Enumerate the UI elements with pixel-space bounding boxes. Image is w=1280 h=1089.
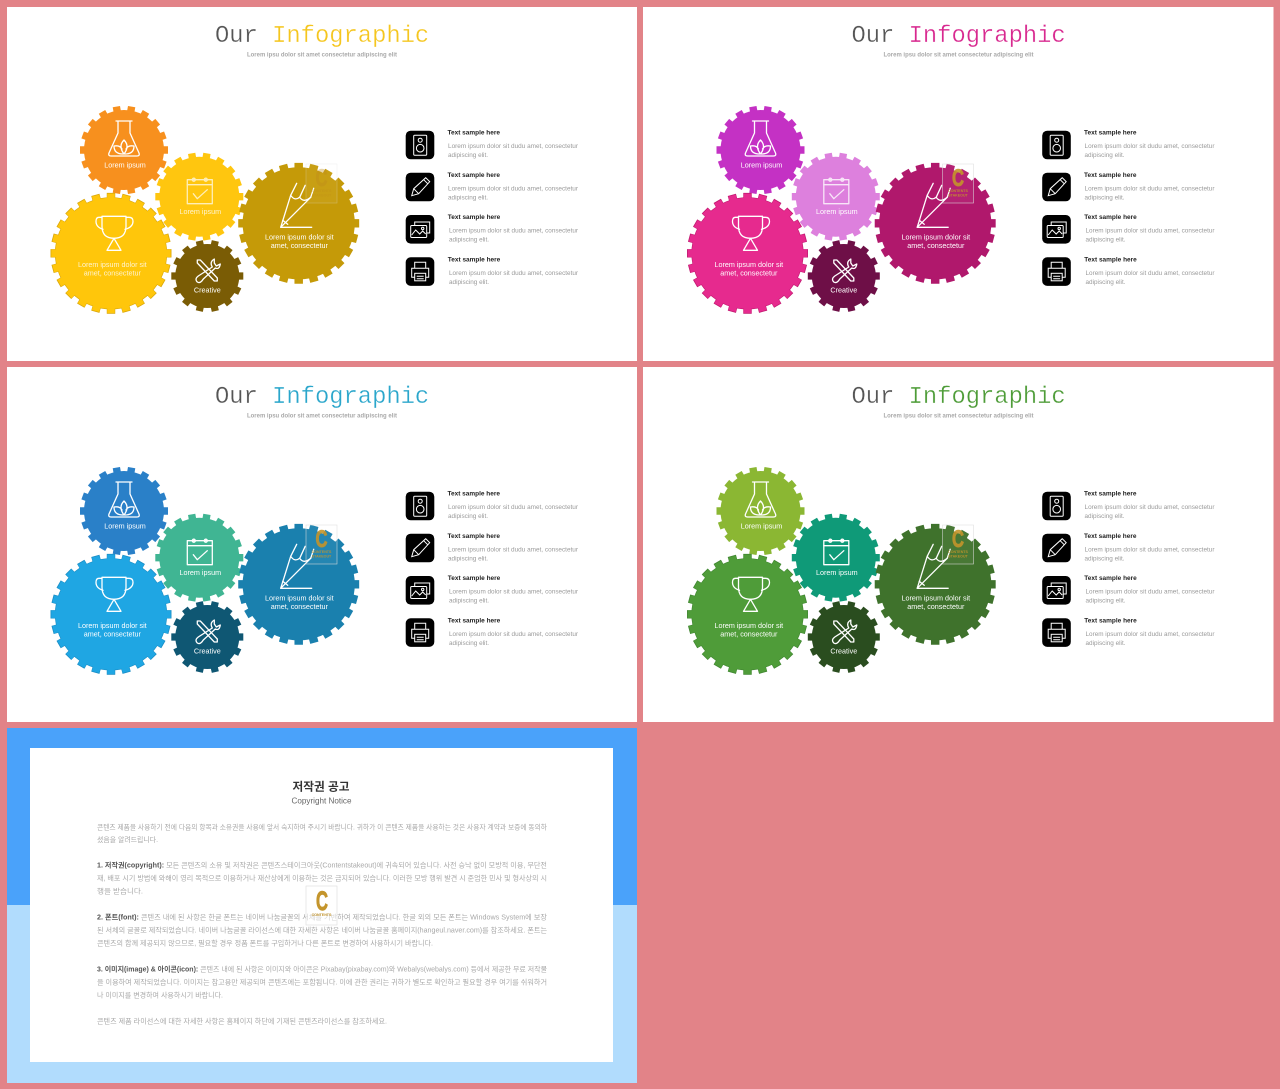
watermark: STAKEOUT bbox=[948, 554, 969, 558]
list item 2 bbox=[406, 172, 579, 202]
list item 1: Text sample here bbox=[1084, 130, 1137, 137]
list item 4: Lorem ipsum dolor sit dudu amet, consectetur bbox=[449, 270, 579, 277]
list item 1: adipiscing elit. bbox=[1084, 513, 1125, 520]
gear: tools bbox=[808, 241, 880, 311]
watermark: C bbox=[952, 526, 964, 553]
list item 4: Text sample here bbox=[448, 617, 501, 624]
watermark: CONTENTS bbox=[948, 550, 968, 554]
list item 4 bbox=[1042, 617, 1215, 647]
watermark: C bbox=[952, 165, 964, 192]
panel: copyright notice bbox=[7, 728, 637, 1083]
list item 2: Lorem ipsum dolor sit dudu amet, consectetur bbox=[448, 546, 579, 554]
list item 3: Lorem ipsum dolor sit dudu amet, consectetur bbox=[449, 588, 579, 596]
panel: green infographic bbox=[643, 367, 1274, 722]
list item 3: Lorem ipsum dolor sit dudu amet, consectetur bbox=[449, 228, 579, 234]
watermark: CONTENTS bbox=[312, 189, 332, 193]
list item 3 bbox=[406, 575, 579, 605]
gear: pencil bbox=[875, 163, 996, 284]
intro paragraph: 콘텐츠 제품을 사용하기 전에 다음의 항목과 소유권을 사용에 앞서 숙지하여 주시기 바랍니다. 귀하가 이 콘텐츠 제품을 사용하는 것은 사용자 계약과 보증에 동의하 bbox=[97, 822, 548, 832]
gear: pencil: Lorem ipsum dolor sit bbox=[901, 232, 970, 241]
watermark: STAKEOUT bbox=[948, 194, 969, 198]
gear: trophy bbox=[51, 554, 171, 675]
watermark bbox=[942, 525, 974, 564]
list item 1: Lorem ipsum dolor sit dudu amet, consectetur bbox=[1084, 143, 1215, 150]
gear: trophy: Lorem ipsum dolor sit bbox=[714, 621, 783, 630]
list item 3: Lorem ipsum dolor sit dudu amet, consectetur bbox=[1086, 228, 1215, 234]
watermark: CONTENTS bbox=[312, 913, 332, 917]
gear: calendar bbox=[155, 514, 243, 601]
panel: blue infographic bbox=[7, 367, 637, 722]
list item 1: adipiscing elit. bbox=[448, 152, 488, 159]
watermark: CONTENTS bbox=[312, 550, 332, 554]
list item 4: Text sample here bbox=[1084, 256, 1137, 263]
list item 1: Lorem ipsum dolor sit dudu amet, consectetur bbox=[1084, 504, 1215, 511]
list item 4: Lorem ipsum dolor sit dudu amet, consectetur bbox=[449, 631, 579, 638]
subtitle: Lorem ipsu dolor sit amet consectetur adipiscing elit bbox=[884, 52, 1034, 58]
notice subheading: Copyright Notice bbox=[292, 796, 352, 806]
gear: trophy: Lorem ipsum dolor sit bbox=[78, 621, 147, 630]
list item 2: Text sample here bbox=[448, 533, 500, 540]
watermark: C bbox=[316, 886, 328, 916]
watermark: C bbox=[316, 526, 328, 553]
list item 2 bbox=[1042, 172, 1215, 202]
section 2 font: 2. 폰트(font): 콘텐츠 내에 된 사항은 한글 폰트는 네이버 나눔글꼴의 서체를 기반하여 제작되었습니다. 한글 외의 모든 폰트는 Windows System에 보장 bbox=[97, 912, 548, 922]
gear: tools: Creative bbox=[830, 285, 857, 294]
subtitle: Lorem ipsu dolor sit amet consectetur adipiscing elit bbox=[247, 52, 398, 58]
gear: pencil bbox=[238, 524, 359, 645]
gear: pencil bbox=[875, 524, 996, 645]
gear: flask: Lorem ipsum bbox=[104, 160, 146, 170]
list item 3: adipiscing elit. bbox=[449, 598, 489, 604]
panel: yellow infographic bbox=[7, 7, 637, 361]
gear: flask bbox=[716, 468, 804, 554]
list item 4: Lorem ipsum dolor sit dudu amet, consectetur bbox=[1086, 631, 1215, 638]
intro paragraph bbox=[97, 822, 548, 844]
section 3 image and icon: 을 이용하여 제작되었습니다. 이미지는 참고용만 제공되며 콘텐츠에는 포함됩니다. 이에 관한 권리는 귀하가 별도로 확인하고 필요할 경우 여기를 쉬워하거 bbox=[97, 978, 547, 986]
gear: flask bbox=[80, 107, 168, 193]
gear: flask: Lorem ipsum bbox=[741, 522, 782, 530]
list item 2: Lorem ipsum dolor sit dudu amet, consectetur bbox=[1084, 546, 1215, 554]
title: Our Infographic bbox=[215, 384, 429, 411]
gear: pencil: amet, consectetur bbox=[271, 241, 328, 250]
gear: pencil: Lorem ipsum dolor sit bbox=[265, 232, 334, 241]
gear: pencil: Lorem ipsum dolor sit bbox=[901, 593, 970, 602]
list item 4 bbox=[406, 256, 579, 286]
gear: calendar bbox=[792, 514, 880, 601]
list item 4 bbox=[406, 617, 579, 647]
section 2 font: 된 서체의 글꼴로 제작되었습니다. 네이버 나눔글꼴 라이선스에 대한 자세한 사항은 네이버 나눔글꼴 홈페이지(hangeul.naver.com)를 참조하세요. 폰트는 bbox=[97, 926, 548, 934]
list item 1 bbox=[1042, 130, 1215, 159]
gear: flask: Lorem ipsum bbox=[741, 160, 782, 170]
closing line: 콘텐츠 제품 라이선스에 대한 자세한 사항은 홈페이지 하단에 기재된 콘텐츠라이선스를 참조하세요. bbox=[97, 1016, 387, 1026]
list item 1: adipiscing elit. bbox=[448, 513, 488, 520]
watermark bbox=[306, 525, 337, 564]
gear: trophy: amet, consectetur bbox=[84, 629, 141, 638]
list item 1: Text sample here bbox=[1084, 491, 1137, 498]
gear: tools bbox=[171, 241, 243, 311]
gear: tools bbox=[171, 602, 243, 672]
list item 2: Text sample here bbox=[1084, 172, 1137, 179]
list item 3 bbox=[406, 214, 579, 244]
subtitle: Lorem ipsu dolor sit amet consectetur adipiscing elit bbox=[884, 412, 1034, 420]
panel: magenta infographic bbox=[643, 7, 1274, 361]
list item 3: Lorem ipsum dolor sit dudu amet, consectetur bbox=[1086, 588, 1215, 596]
list item 3: adipiscing elit. bbox=[449, 236, 489, 244]
section 2 font bbox=[97, 912, 548, 948]
gear: trophy bbox=[51, 193, 171, 314]
watermark bbox=[942, 164, 974, 203]
gear: pencil: amet, consectetur bbox=[271, 602, 328, 611]
title: Our Infographic bbox=[852, 384, 1066, 411]
section 1 copyright: 재, 배포 시기 방법에 와해이 영리 목적으로 이용하거나 재산상에게 이용하는 것은 금지되어 있습니다. 이러한 모방 행위 발견 시 준엄한 민사 및 형사상의 시 bbox=[97, 874, 547, 882]
gear: calendar: Lorem ipsum bbox=[816, 568, 858, 577]
list item 4: adipiscing elit. bbox=[449, 279, 489, 286]
list item 4: adipiscing elit. bbox=[1086, 640, 1126, 647]
watermark bbox=[306, 886, 337, 925]
list item 2: Text sample here bbox=[1084, 533, 1137, 540]
list item 1: Lorem ipsum dolor sit dudu amet, consectetur bbox=[448, 504, 579, 511]
subtitle: Lorem ipsu dolor sit amet consectetur adipiscing elit bbox=[247, 412, 398, 420]
gear: calendar: Lorem ipsum bbox=[180, 568, 221, 577]
list item 1 bbox=[406, 130, 579, 159]
gear: pencil: amet, consectetur bbox=[907, 602, 965, 611]
list item 1: Text sample here bbox=[448, 130, 500, 137]
gear: trophy: Lorem ipsum dolor sit bbox=[78, 260, 147, 269]
title: Our Infographic bbox=[852, 23, 1066, 50]
list item 3 bbox=[1042, 575, 1215, 605]
watermark: CONTENTS bbox=[948, 189, 968, 193]
watermark bbox=[306, 164, 337, 203]
gear: trophy: amet, consectetur bbox=[720, 629, 778, 638]
gear: flask bbox=[80, 468, 168, 554]
list item 1: Lorem ipsum dolor sit dudu amet, consectetur bbox=[448, 143, 579, 150]
list item 3: Text sample here bbox=[1084, 214, 1137, 221]
gear: tools bbox=[808, 602, 880, 672]
list item 4: adipiscing elit. bbox=[1086, 279, 1126, 286]
list item 4: Text sample here bbox=[448, 256, 501, 263]
watermark: STAKEOUT bbox=[312, 554, 332, 558]
list item 4: Lorem ipsum dolor sit dudu amet, consectetur bbox=[1086, 270, 1215, 277]
section 2 font: 콘텐츠의 함께 제공되지 않으므로, 필요할 경우 정품 폰트를 구입하거나 다른 폰트로 변경하여 사용하시기 바랍니다. bbox=[97, 938, 433, 948]
list item 4: Text sample here bbox=[1084, 617, 1137, 624]
gear: pencil: amet, consectetur bbox=[907, 241, 965, 250]
list item 4 bbox=[1042, 256, 1215, 286]
list item 1 bbox=[406, 491, 579, 520]
gear: tools: Creative bbox=[194, 285, 221, 294]
list item 1: Text sample here bbox=[448, 491, 500, 498]
gear: flask: Lorem ipsum bbox=[104, 522, 146, 530]
list item 2: Lorem ipsum dolor sit dudu amet, consectetur bbox=[1084, 186, 1215, 192]
gear: calendar bbox=[155, 153, 243, 240]
gear: pencil bbox=[238, 163, 359, 284]
list item 2: adipiscing elit. bbox=[1084, 194, 1125, 202]
section 3 image and icon: 나 이미지를 변경하여 사용하시기 바랍니다. bbox=[97, 990, 223, 1000]
watermark: C bbox=[316, 165, 328, 192]
list item 3: adipiscing elit. bbox=[1086, 598, 1126, 604]
list item 2: adipiscing elit. bbox=[448, 556, 488, 562]
list item 3: Text sample here bbox=[1084, 575, 1137, 582]
section 1 copyright bbox=[97, 860, 547, 896]
notice heading: 저작권 공고 bbox=[292, 780, 350, 794]
gear: flask bbox=[716, 107, 804, 193]
section 1 copyright: 1. 저작권(copyright): 모든 콘텐츠의 소유 및 저작권은 콘텐츠스테이크아웃(Contentstakeout)에 귀속되어 있습니다. 사전 승낙 없이 모방적 이용, 무단전 bbox=[97, 860, 547, 870]
section 3 image and icon: 3. 이미지(image) & 아이콘(icon): 콘텐츠 내에 된 사항은 이미지와 아이콘은 Pixabay(pixabay.com)와 Webalys(webalys.com) 등에서 제공한 무료 저작물 bbox=[97, 964, 548, 974]
gear: trophy: Lorem ipsum dolor sit bbox=[714, 260, 783, 269]
list item 3: adipiscing elit. bbox=[1086, 236, 1126, 244]
section 1 copyright: 행을 받습니다. bbox=[97, 886, 143, 896]
gear: trophy: amet, consectetur bbox=[84, 268, 141, 277]
gear: calendar: Lorem ipsum bbox=[180, 207, 221, 216]
gear: pencil: Lorem ipsum dolor sit bbox=[265, 593, 334, 602]
list item 2: Lorem ipsum dolor sit dudu amet, consectetur bbox=[448, 186, 579, 192]
gear: calendar: Lorem ipsum bbox=[816, 207, 858, 216]
list item 2: adipiscing elit. bbox=[1084, 556, 1125, 562]
gear: trophy: amet, consectetur bbox=[720, 268, 778, 277]
list item 2: Text sample here bbox=[448, 172, 500, 179]
list item 3: Text sample here bbox=[448, 575, 501, 582]
gear: tools: Creative bbox=[194, 646, 221, 655]
watermark: STAKEOUT bbox=[312, 194, 332, 198]
gear: trophy bbox=[687, 554, 808, 675]
list item 3: Text sample here bbox=[448, 214, 501, 221]
list item 1: adipiscing elit. bbox=[1084, 152, 1125, 159]
gear: tools: Creative bbox=[830, 646, 857, 655]
section 3 image and icon bbox=[97, 964, 548, 1000]
list item 4: adipiscing elit. bbox=[449, 640, 489, 647]
list item 3 bbox=[1042, 214, 1215, 244]
list item 2: adipiscing elit. bbox=[448, 194, 488, 202]
gear: calendar bbox=[792, 153, 880, 240]
list item 1 bbox=[1042, 491, 1215, 520]
title: Our Infographic bbox=[215, 23, 429, 50]
list item 2 bbox=[1042, 533, 1215, 562]
intro paragraph: 셨음을 알려드립니다. bbox=[97, 835, 158, 844]
gear: trophy bbox=[687, 193, 808, 314]
list item 2 bbox=[406, 533, 579, 562]
